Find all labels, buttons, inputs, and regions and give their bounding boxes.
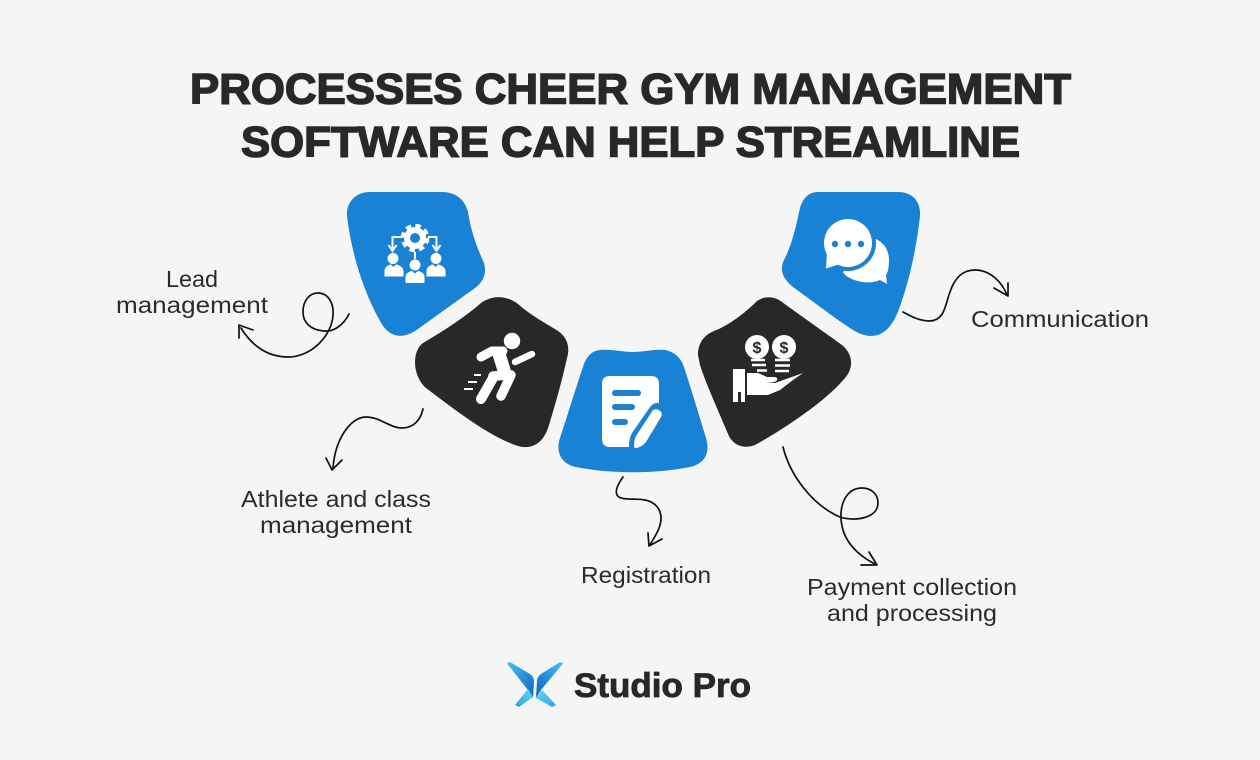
panel: lead management shape and icon xyxy=(347,192,485,336)
panel: registration shape and icon xyxy=(558,350,708,472)
label: lead management: management xyxy=(116,292,269,318)
label: lead management: Lead xyxy=(166,266,218,292)
icon: form and pencil xyxy=(602,376,662,448)
icon: coins over hand xyxy=(733,335,803,402)
icon: chat bubbles xyxy=(820,215,889,284)
label: communication: Communication xyxy=(971,306,1149,332)
icon: coins over hand: $ xyxy=(780,340,789,357)
arrow: to payment collection and processing xyxy=(783,447,878,565)
panel: communication shape and icon xyxy=(782,192,920,336)
arrow: to athlete and class management xyxy=(326,409,423,470)
icon: running athlete xyxy=(464,333,532,399)
title: SOFTWARE CAN HELP STREAMLINE xyxy=(241,118,1020,166)
arrow: to registration xyxy=(616,477,662,546)
label: athlete and class management: management xyxy=(260,512,413,538)
label: lead management xyxy=(116,266,269,318)
panel: payment shape and icon xyxy=(698,297,851,447)
panel: athlete and class management shape and icon xyxy=(415,297,568,447)
icon: coins over hand: $ xyxy=(753,340,762,357)
label: payment collection and processing xyxy=(807,574,1017,626)
icon: logo mark xyxy=(507,662,563,707)
label: registration: Registration xyxy=(581,562,711,588)
logo: Studio Pro: Studio Pro xyxy=(574,667,751,705)
arrow: to lead management xyxy=(239,293,349,357)
label: payment collection and processing: and processing xyxy=(827,600,997,626)
icon: gear and team xyxy=(384,226,446,283)
logo: Studio Pro xyxy=(507,662,751,707)
label: athlete and class management xyxy=(241,486,431,538)
title xyxy=(190,66,1071,166)
label: payment collection and processing: Payment collection xyxy=(807,574,1017,600)
label: athlete and class management: Athlete and class xyxy=(241,486,431,512)
title: PROCESSES CHEER GYM MANAGEMENT xyxy=(190,66,1071,114)
arrow: to communication xyxy=(903,270,1008,321)
